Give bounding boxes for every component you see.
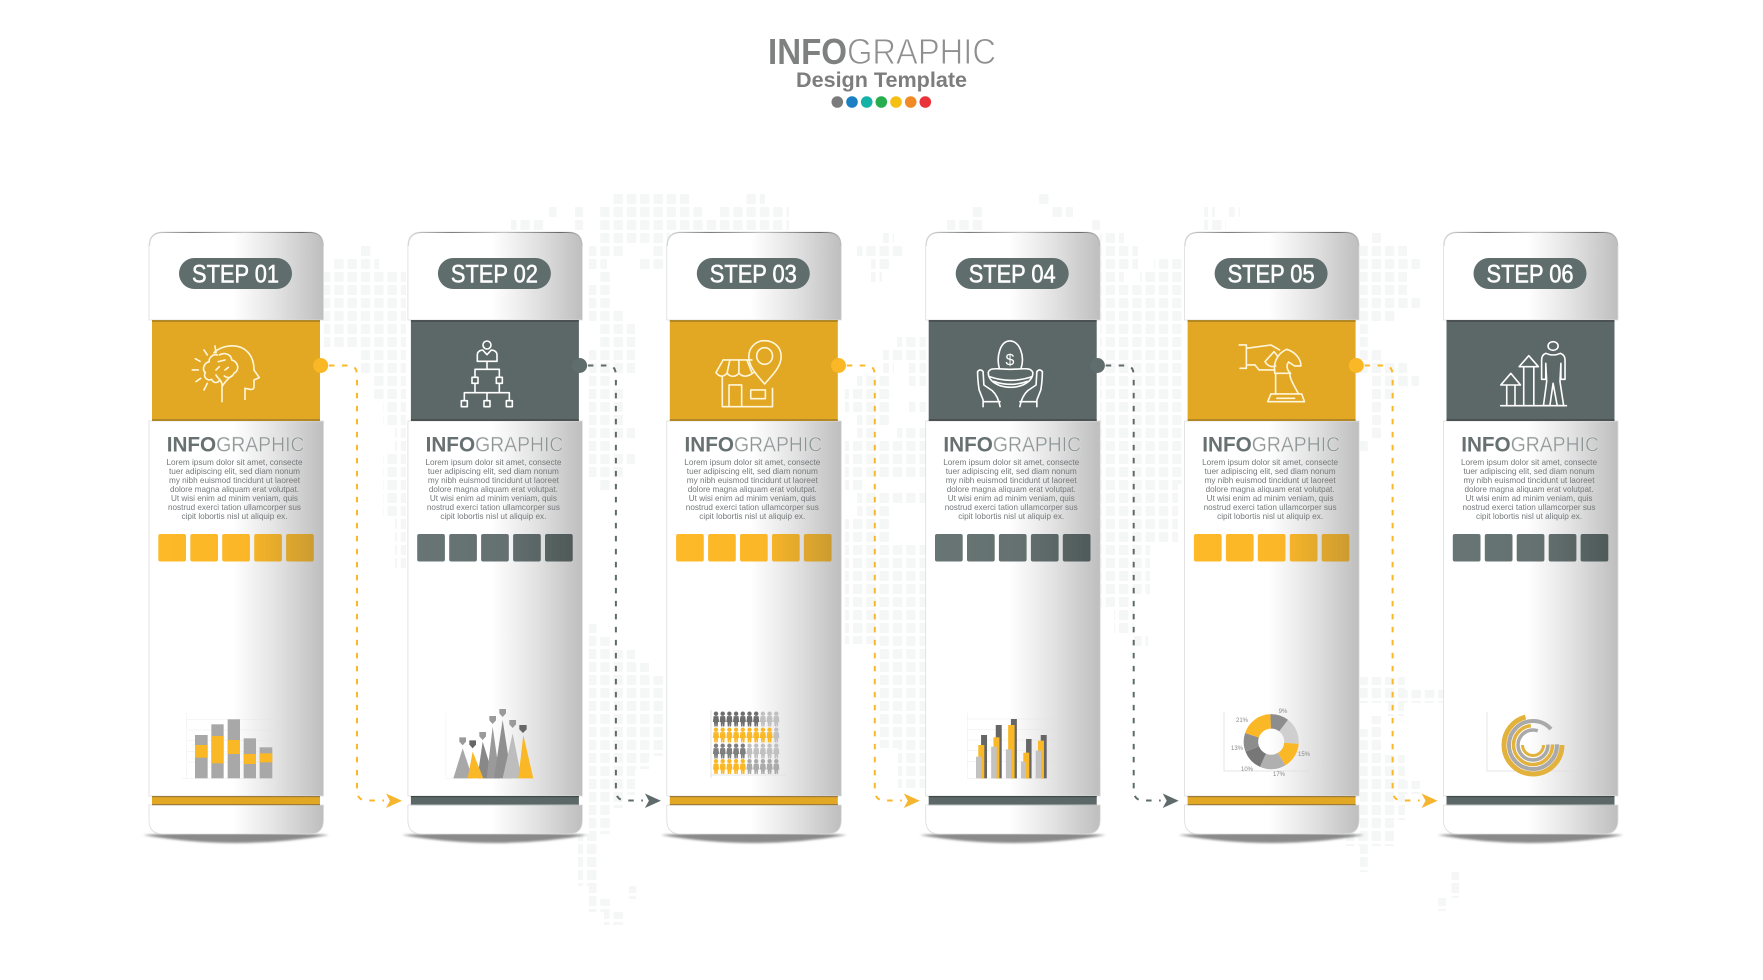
- panel: step 03: Lorem ipsum dolor sit amet, consecte: [684, 458, 821, 467]
- panel: step 02: Lorem ipsum dolor sit amet, consecte: [425, 458, 562, 467]
- panel: step 06: Ut wisi enim ad minim veniam, quis: [1466, 494, 1592, 503]
- panel: step 01: nostrud exerci tation ullamcorper sus: [168, 503, 301, 512]
- chart: grouped bars: [967, 713, 1055, 778]
- panel: step 06: nostrud exerci tation ullamcorper sus: [1462, 503, 1596, 512]
- panel: step 05: Ut wisi enim ad minim veniam, quis: [1207, 494, 1334, 503]
- panel: step 05: dolore magna aliquam erat volutpat.: [1206, 485, 1335, 494]
- panel: step 05: GRAPHIC: [1252, 434, 1340, 457]
- panel: step 05: cipit lobortis nisl ut aliquip ex.: [1217, 512, 1323, 521]
- connector: step 3 to 4: [847, 366, 920, 808]
- panel: step 01: Lorem ipsum dolor sit amet, consecte: [166, 458, 303, 467]
- panel: step 05: INFO: [1202, 434, 1252, 457]
- panel: step 01: dolore magna aliquam erat volutpat.: [170, 485, 299, 494]
- title: INFO: [768, 31, 847, 72]
- icon: head with brain: [192, 346, 259, 402]
- panel: step 04: tuer adipiscing elit, sed diam nonum: [946, 467, 1077, 476]
- icon: hands holding nest egg: [978, 341, 1042, 407]
- panel: step 06: GRAPHIC: [1511, 434, 1599, 457]
- chart: stacked bars: [182, 713, 273, 778]
- panel: step 04: dolore magna aliquam erat volutpat.: [947, 485, 1076, 494]
- connector: step 2 to 3: [588, 366, 661, 808]
- chart: donut: 17%: [1273, 772, 1286, 778]
- background: dotted world map: [324, 193, 1459, 925]
- panel: step 03: my nibh euismod tincidunt ut laoreet: [687, 476, 819, 485]
- panel: step 04: STEP 04: [969, 260, 1056, 288]
- chart: donut: 21%: [1236, 718, 1249, 724]
- panel: step 02: INFO: [426, 434, 475, 457]
- chart: concentric arcs: [1487, 712, 1576, 774]
- panel: step 02: dolore magna aliquam erat volutpat.: [429, 485, 558, 494]
- panel: step 02: GRAPHIC: [475, 434, 563, 457]
- panel: step 05: STEP 05: [1228, 260, 1315, 288]
- colour dots: [832, 96, 931, 108]
- panel: step 02: STEP 02: [451, 260, 538, 288]
- title: [768, 31, 996, 108]
- panel: step 03: GRAPHIC: [734, 434, 822, 457]
- panel: step 01: tuer adipiscing elit, sed diam nonum: [169, 467, 300, 476]
- icon: hands holding nest egg: $: [1006, 352, 1015, 369]
- panel: step 06: cipit lobortis nisl ut aliquip ex.: [1476, 512, 1582, 521]
- chart: donut: [1224, 709, 1311, 778]
- icon: organisation chart: [461, 341, 512, 407]
- icon: hand moving chess knight: [1239, 345, 1304, 402]
- chart: people rows: [711, 710, 786, 778]
- panel: step 01: GRAPHIC: [216, 434, 304, 457]
- panel: step 05: tuer adipiscing elit, sed diam nonum: [1205, 467, 1336, 476]
- title: GRAPHIC: [847, 31, 996, 72]
- panel: step 02: nostrud exerci tation ullamcorper sus: [427, 503, 560, 512]
- chart: donut: 13%: [1231, 746, 1244, 752]
- panel: step 02: Ut wisi enim ad minim veniam, quis: [430, 494, 557, 503]
- panel: step 04: nostrud exerci tation ullamcorper sus: [945, 503, 1078, 512]
- panel: step 03: dolore magna aliquam erat volutpat.: [688, 485, 817, 494]
- panel: step 06: tuer adipiscing elit, sed diam nonum: [1464, 467, 1595, 476]
- subtitle: Design Template: [796, 68, 967, 92]
- icon: shop with location pin: [716, 341, 781, 407]
- chart: triangle peaks with pins: [446, 709, 533, 778]
- panel: step 04: my nibh euismod tincidunt ut laoreet: [946, 476, 1077, 485]
- panel: step 01: [143, 232, 329, 843]
- panel: step 04: Ut wisi enim ad minim veniam, quis: [948, 494, 1075, 503]
- panel: step 05: my nibh euismod tincidunt ut laoreet: [1205, 476, 1336, 485]
- panel: step 06: dolore magna aliquam erat volutpat.: [1464, 485, 1594, 494]
- panel: step 02: tuer adipiscing elit, sed diam nonum: [428, 467, 559, 476]
- chart: donut: 10%: [1241, 767, 1254, 773]
- panel: step 02: my nibh euismod tincidunt ut laoreet: [428, 476, 560, 485]
- panel: step 06: my nibh euismod tincidunt ut laoreet: [1464, 476, 1595, 485]
- panel: step 04: [920, 232, 1106, 843]
- panel: step 01: STEP 01: [192, 260, 279, 288]
- connector: step 5 to 6: [1365, 366, 1438, 808]
- panel: step 03: Ut wisi enim ad minim veniam, quis: [689, 494, 816, 503]
- panel: step 02: cipit lobortis nisl ut aliquip ex.: [440, 512, 546, 521]
- panel: step 04: INFO: [943, 434, 993, 457]
- panel: step 04: Lorem ipsum dolor sit amet, consecte: [943, 458, 1080, 467]
- icon: growth arrows and person: [1501, 342, 1566, 406]
- chart: donut: 9%: [1279, 709, 1288, 715]
- panel: step 06: INFO: [1461, 434, 1511, 457]
- chart: donut: 15%: [1298, 752, 1311, 758]
- connector: step 1 to 2: [329, 366, 402, 808]
- panel: step 01: Ut wisi enim ad minim veniam, quis: [171, 494, 298, 503]
- connector: step 4 to 5: [1106, 366, 1179, 808]
- panel: step 05: [1179, 232, 1365, 843]
- panel: step 03: [661, 232, 847, 843]
- panel: step 06: Lorem ipsum dolor sit amet, consecte: [1461, 458, 1597, 467]
- panel: step 03: tuer adipiscing elit, sed diam nonum: [687, 467, 818, 476]
- panel: step 01: my nibh euismod tincidunt ut laoreet: [169, 476, 301, 485]
- panel: step 01: INFO: [167, 434, 216, 457]
- panel: step 03: INFO: [684, 434, 734, 457]
- panel: step 06: STEP 06: [1486, 260, 1574, 288]
- panel: step 03: STEP 03: [710, 260, 797, 288]
- panel: step 05: Lorem ipsum dolor sit amet, consecte: [1202, 458, 1339, 467]
- panel: step 04: cipit lobortis nisl ut aliquip ex.: [958, 512, 1064, 521]
- panel: step 03: cipit lobortis nisl ut aliquip ex.: [699, 512, 805, 521]
- panel: step 01: cipit lobortis nisl ut aliquip ex.: [182, 512, 288, 521]
- panel: step 02: [402, 232, 588, 843]
- panel: step 03: nostrud exerci tation ullamcorper sus: [686, 503, 819, 512]
- panel: step 05: nostrud exerci tation ullamcorper sus: [1204, 503, 1337, 512]
- panel: step 04: GRAPHIC: [993, 434, 1081, 457]
- panel: step 06: [1438, 232, 1624, 843]
